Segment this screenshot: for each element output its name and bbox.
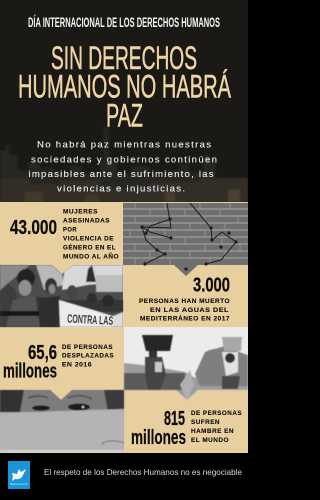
stat: people suffering hunger: millones <box>131 427 186 449</box>
stat: deaths in the Mediterranean: 3.000 <box>193 275 230 297</box>
stat: people suffering hunger: SUFREN <box>191 419 220 426</box>
panel: cream statistics background <box>0 202 248 453</box>
photo: barbed wire on brick wall <box>123 203 248 276</box>
text block: introduction: impasibles ante el sufrimiento, las <box>28 169 214 180</box>
photo: women carrying basins <box>124 327 248 400</box>
stat: displaced people: millones <box>3 361 57 383</box>
text block: introduction: No habrá paz mientras nuestras <box>37 140 211 150</box>
photo: protest march with banner: CONTRA LAS <box>67 312 114 328</box>
photo: protest march with banner <box>0 265 123 328</box>
stat: women murdered: ASESINADAS <box>63 218 110 225</box>
stat: women murdered: MUNDO AL AÑO <box>63 252 119 260</box>
icon: blue logo with white dove <box>8 461 30 489</box>
stat: people suffering hunger: HAMBRE EN <box>191 428 234 435</box>
stat: women murdered <box>10 209 119 260</box>
footer message: El respeto de los Derechos Humanos no es negociable <box>44 467 242 477</box>
stat: women murdered: POR <box>63 226 77 234</box>
icon: blue logo with white dove: Plataforma por la Paz <box>10 482 28 486</box>
stat: people suffering hunger: DE PERSONAS <box>191 410 242 417</box>
text block: introduction: violencias e injusticias. <box>57 184 185 194</box>
text block: introduction <box>28 140 217 194</box>
text block: introduction: sociedades y gobiernos continúen <box>31 154 217 166</box>
title <box>18 40 231 134</box>
photo: child's eyes above a sheet of paper <box>0 390 124 452</box>
stat: displaced people: DE PERSONAS <box>62 344 113 351</box>
title: PAZ <box>106 98 143 134</box>
stat: displaced people: DESPLAZADAS <box>62 353 114 360</box>
stat: displaced people: EN 2016 <box>62 362 92 369</box>
stat: people suffering hunger: 815 <box>164 408 185 430</box>
stat: displaced people <box>3 342 114 383</box>
panel: header background with city skyline <box>0 0 248 205</box>
stat: deaths in the Mediterranean: EN LAS AGUAS DEL <box>150 307 229 314</box>
stat: displaced people: 65,6 <box>28 342 57 364</box>
stat: deaths in the Mediterranean: PERSONAS HAN MUERTO <box>139 298 230 305</box>
stat: deaths in the Mediterranean <box>139 275 230 323</box>
stat: women murdered: GÉNERO EN EL <box>63 242 116 252</box>
stat: women murdered: VIOLENCIA DE <box>63 236 114 242</box>
stat: women murdered: MUJERES <box>63 209 98 216</box>
panel: footer <box>0 453 248 500</box>
stat: deaths in the Mediterranean: MEDITERRÁNEO EN 2017 <box>140 314 230 323</box>
stat: women murdered: 43.000 <box>10 217 57 239</box>
stat: people suffering hunger: EL MUNDO <box>191 437 229 444</box>
stat: people suffering hunger <box>131 408 242 449</box>
